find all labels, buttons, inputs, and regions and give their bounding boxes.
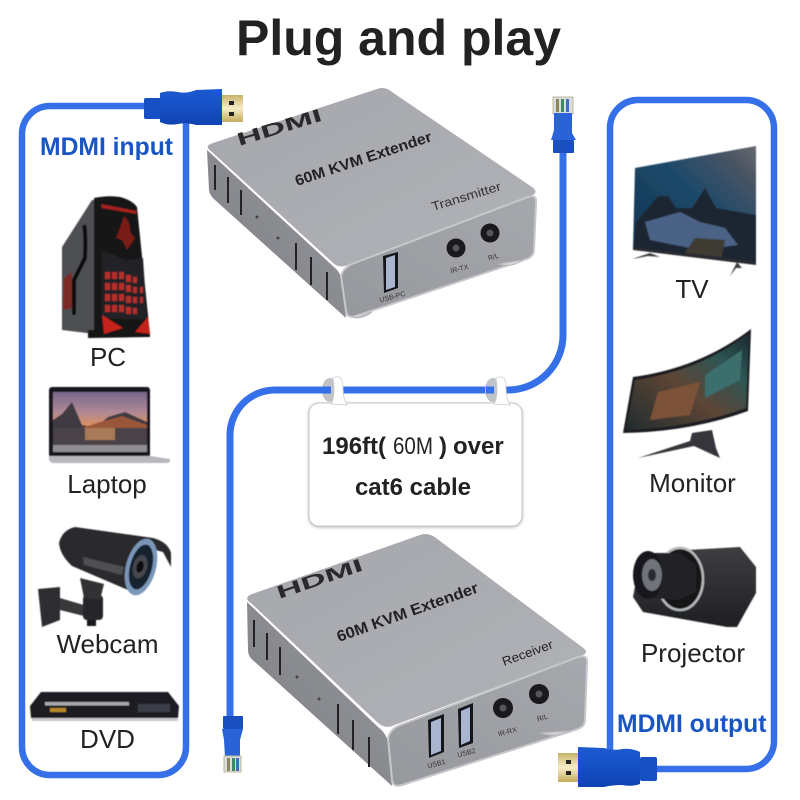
R/L jack: R/L bbox=[536, 714, 549, 723]
IR-TX jack: IR-TX bbox=[450, 264, 470, 275]
transmitter caption: Transmitter bbox=[430, 179, 503, 214]
cable: HDMI input loop bbox=[22, 106, 186, 775]
transmitter side bbox=[207, 150, 346, 318]
IR-RX jack bbox=[493, 698, 518, 738]
label: MDMI output: MDMI output bbox=[617, 711, 766, 738]
tag text line 1: ) bbox=[439, 433, 447, 460]
USB2 port bbox=[457, 703, 476, 759]
USB2 port: USB2 bbox=[457, 748, 476, 759]
label: TV: TV bbox=[675, 274, 709, 304]
icon: laptop bbox=[49, 387, 170, 463]
receiver top bbox=[247, 534, 586, 727]
R/L jack bbox=[529, 684, 549, 723]
HDMI plug: input bbox=[144, 89, 243, 125]
tag text line 1: over bbox=[453, 433, 504, 460]
RJ45 plug: transmitter end bbox=[551, 97, 576, 153]
device: transmitter bbox=[207, 88, 536, 318]
tag text line 1: 60M bbox=[393, 433, 433, 460]
label: PC: PC bbox=[90, 342, 126, 372]
cable: cat6 between units bbox=[230, 150, 563, 720]
transmitter top bbox=[208, 88, 536, 266]
label: DVD: DVD bbox=[80, 724, 135, 754]
label: MDMI input: MDMI input bbox=[40, 134, 173, 161]
USB-PC port: USB-PC bbox=[379, 291, 406, 304]
label: Webcam: Webcam bbox=[56, 629, 159, 659]
icon: PC tower bbox=[62, 196, 150, 338]
tag text line 1 bbox=[322, 433, 504, 460]
label: Projector: Projector bbox=[641, 638, 745, 668]
USB1 port: USB1 bbox=[427, 759, 446, 770]
icon: DVD player bbox=[30, 692, 179, 721]
IR-RX jack: IR-RX bbox=[497, 727, 518, 738]
HDMI plug: output bbox=[558, 747, 657, 787]
USB-PC port bbox=[379, 252, 406, 304]
title: Plug and play bbox=[236, 10, 561, 66]
IR-TX jack bbox=[446, 238, 470, 275]
receiver model text: 60M KVM Extender bbox=[335, 580, 481, 646]
cable: HDMI output loop bbox=[610, 100, 774, 769]
icon: TV bbox=[632, 146, 756, 276]
icon: security webcam bbox=[38, 527, 171, 627]
device: receiver bbox=[247, 534, 587, 786]
receiver front bbox=[388, 656, 587, 786]
cable tag: 196ft over cat6 bbox=[309, 377, 522, 526]
icon: projector bbox=[633, 547, 756, 627]
receiver caption: Receiver bbox=[500, 638, 555, 669]
transmitter HDMI logo: HDMI bbox=[234, 105, 324, 150]
transmitter front bbox=[341, 196, 536, 317]
label: Laptop: Laptop bbox=[67, 469, 147, 499]
receiver HDMI logo: HDMI bbox=[274, 555, 365, 603]
receiver side bbox=[247, 602, 392, 786]
USB1 port bbox=[427, 714, 446, 770]
R/L jack: R/L bbox=[487, 253, 500, 262]
RJ45 plug: receiver end bbox=[222, 716, 243, 772]
R/L jack bbox=[480, 224, 500, 262]
label: Monitor: Monitor bbox=[649, 468, 736, 498]
transmitter model text: 60M KVM Extender bbox=[293, 128, 434, 190]
tag text line 2: cat6 cable bbox=[355, 474, 471, 501]
tag text line 1: 196ft( bbox=[322, 433, 386, 460]
icon: curved monitor bbox=[623, 329, 751, 458]
